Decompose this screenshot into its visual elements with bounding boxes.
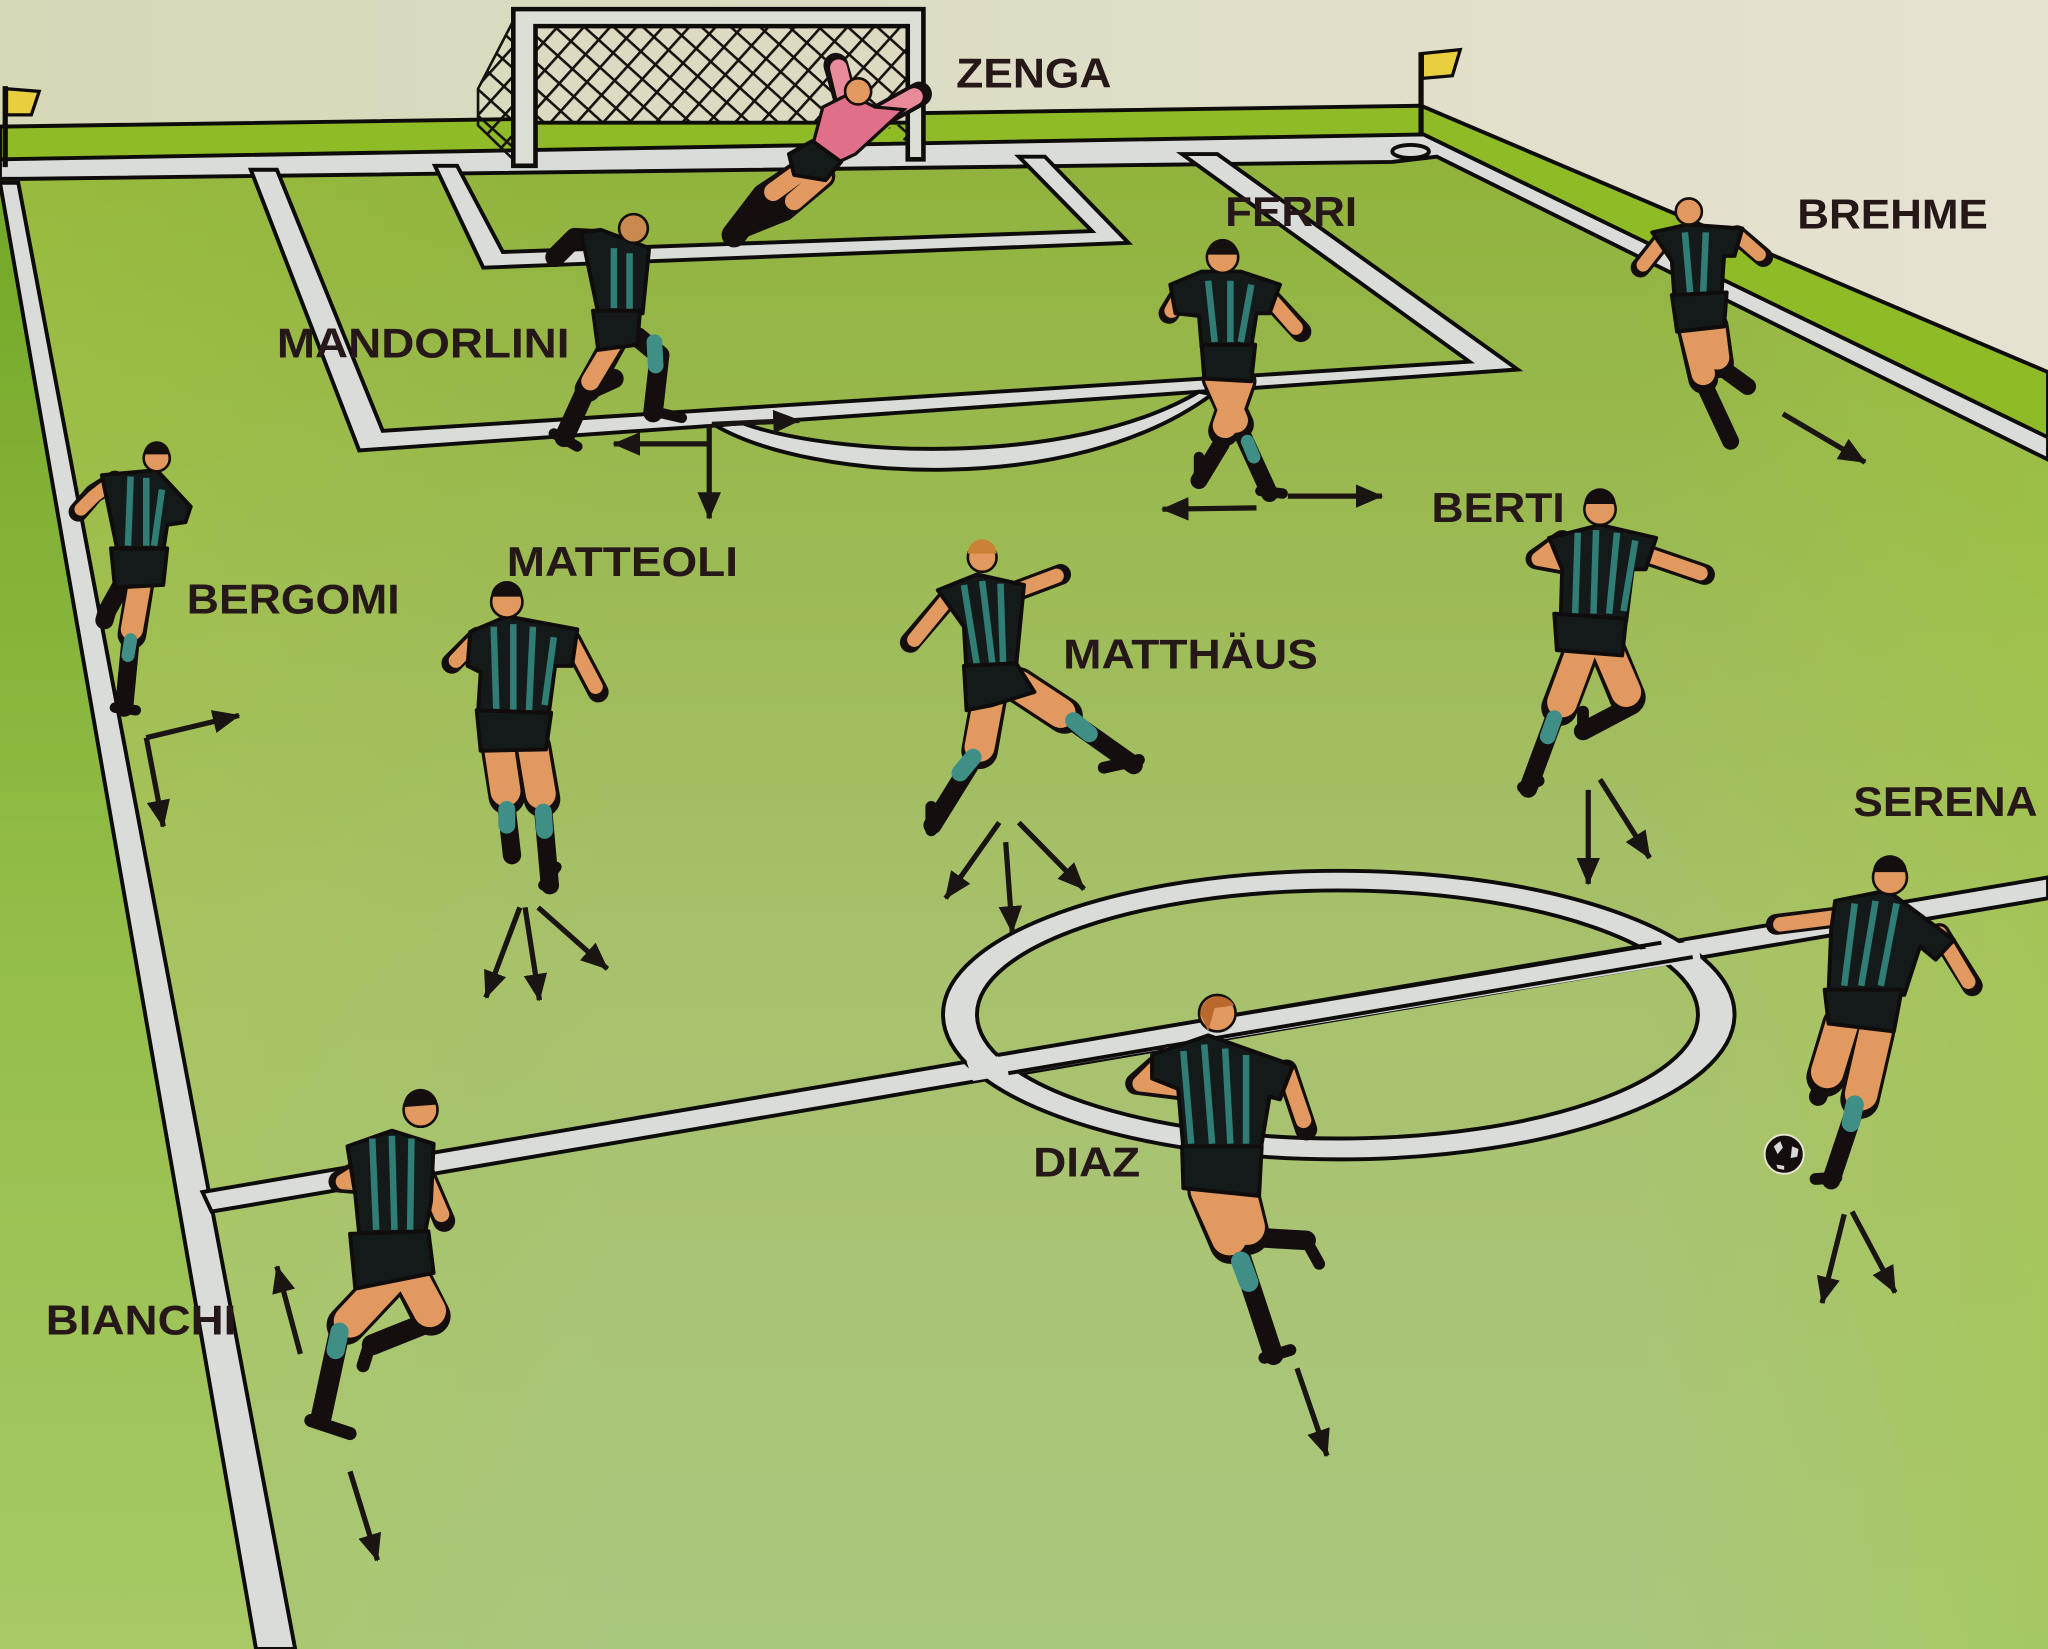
- arrow: Brehme: [1783, 414, 1865, 462]
- player: Mandorlini: [554, 214, 682, 447]
- arrows: Bergomi: [146, 715, 239, 826]
- arrow: Diaz: [1297, 1368, 1327, 1456]
- label: Matteoli: MATTEOLI: [507, 538, 738, 585]
- player: Matteoli: [452, 581, 598, 885]
- arrows: Serena: [1822, 1212, 1895, 1303]
- player: Diaz: [1136, 995, 1319, 1358]
- corner flag right: [1421, 50, 1460, 136]
- label: Brehme: BREHME: [1797, 190, 1988, 237]
- player: Brehme: [1640, 198, 1763, 441]
- arrows: Bianchi: [277, 1266, 377, 1560]
- player: Berti: [1523, 488, 1704, 789]
- label: Mandorlini: MANDORLINI: [277, 320, 569, 367]
- label: Bianchi: BIANCHI: [46, 1296, 236, 1343]
- player: Ferri: [1169, 239, 1301, 494]
- player: Bergomi: [78, 441, 191, 710]
- label: Bergomi: BERGOMI: [187, 576, 400, 623]
- arrows: Ferri: [1162, 496, 1382, 509]
- arrows: Matthaus: [946, 823, 1084, 932]
- arrows: Berti: [1588, 779, 1650, 884]
- arrows: Matteoli: [486, 907, 607, 1000]
- player: Bianchi: [311, 1089, 444, 1434]
- arrows: Mandorlini: [614, 420, 799, 518]
- goal: [478, 9, 925, 166]
- label: Serena: SERENA: [1853, 778, 2038, 825]
- label: Matthaus: MATTHÄUS: [1063, 630, 1318, 677]
- corner flag left: [5, 86, 39, 167]
- player: Matthaus: [910, 539, 1139, 830]
- label: Diaz: DIAZ: [1033, 1138, 1140, 1185]
- player: Serena with ball: [1765, 855, 1972, 1180]
- label: Ferri: FERRI: [1225, 188, 1357, 235]
- player: Zenga goalkeeper: [734, 65, 920, 235]
- label: Berti: BERTI: [1432, 484, 1565, 531]
- background wall: [0, 0, 2048, 392]
- label: Zenga: ZENGA: [956, 49, 1112, 96]
